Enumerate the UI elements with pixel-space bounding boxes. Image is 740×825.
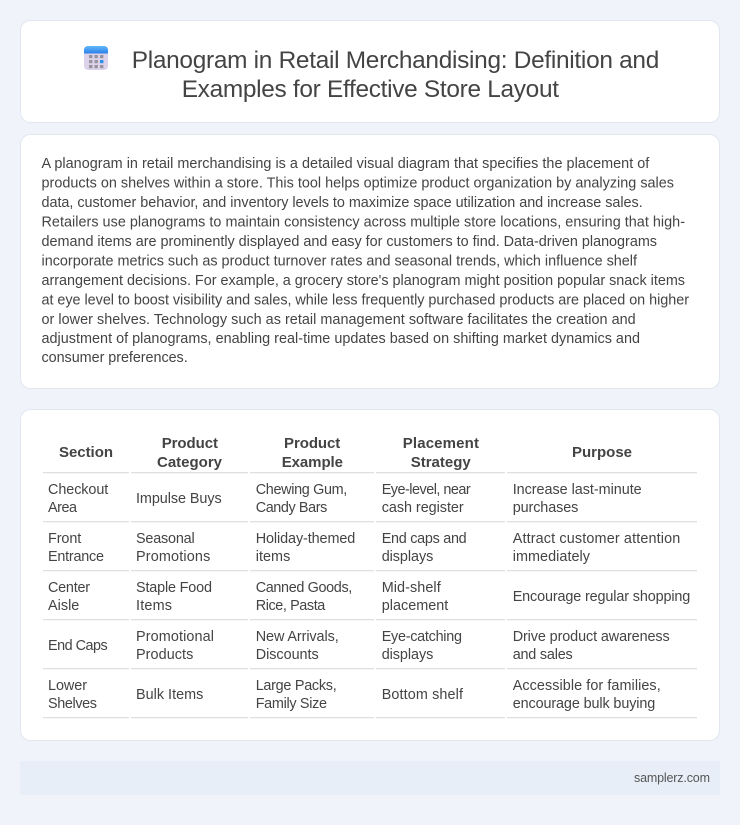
panel: title card bbox=[20, 20, 720, 122]
table row: center aisle: Canned Goods, bbox=[256, 580, 352, 596]
table row: front entrance: End caps and bbox=[382, 531, 467, 547]
table row: center aisle: placement bbox=[382, 598, 448, 614]
table row: checkout area: Area bbox=[48, 500, 77, 516]
table row: front entrance: Promotions bbox=[136, 549, 210, 565]
table row: center aisle: Mid-shelf bbox=[382, 580, 442, 596]
table row: checkout area bbox=[48, 482, 642, 516]
table header row: Example bbox=[282, 454, 343, 471]
title: Examples for Effective Store Layout bbox=[182, 76, 559, 103]
text block: planogram description: Retailers use planograms to maintain consistency across multiple store locations, ensuring that high- bbox=[42, 214, 685, 230]
table row: lower shelves: Family Size bbox=[256, 696, 327, 712]
table row: end caps: Drive product awareness bbox=[513, 629, 670, 645]
text block: planogram description: data, customer behavior, and inventory levels to maximize space utilization and increase sales. bbox=[42, 195, 643, 211]
table row: front entrance: Entrance bbox=[48, 549, 104, 565]
text block: planogram description bbox=[42, 156, 689, 366]
text block: planogram description: products on shelves within a store. This tool helps optimize product organization by analyzing sales bbox=[42, 176, 674, 192]
panel: table card bbox=[20, 410, 720, 740]
table row: lower shelves: Bulk Items bbox=[136, 687, 203, 703]
table row: front entrance: Holiday-themed bbox=[256, 531, 355, 547]
table row: lower shelves: Accessible for families, bbox=[513, 678, 661, 694]
table row: end caps: and sales bbox=[513, 647, 573, 663]
table row: lower shelves: Bottom shelf bbox=[382, 687, 464, 703]
table row: front entrance: Front bbox=[48, 531, 81, 547]
table header row: Placement bbox=[403, 435, 479, 452]
footer bbox=[20, 761, 720, 795]
table row: checkout area: Impulse Buys bbox=[136, 491, 222, 507]
table row: end caps bbox=[48, 629, 670, 663]
table row: lower shelves: Shelves bbox=[48, 696, 97, 712]
table header row: Section bbox=[59, 444, 113, 461]
table header row: Category bbox=[157, 454, 223, 471]
panel: description card bbox=[20, 134, 720, 388]
table row: end caps: New Arrivals, bbox=[256, 629, 339, 645]
table row: end caps: Discounts bbox=[256, 647, 319, 663]
table row: center aisle bbox=[48, 580, 690, 614]
table row: end caps: Products bbox=[136, 647, 193, 663]
text block: planogram description: or lower shelves. Technology such as retail management software facilitates the creation and bbox=[42, 312, 636, 328]
table row: end caps: displays bbox=[382, 647, 433, 663]
text block: planogram description: adjustment of planograms, enabling real-time updates based on shifting market dynamics and bbox=[42, 331, 640, 347]
table header row: Strategy bbox=[411, 454, 471, 471]
text block: planogram description: incorporate metrics such as product turnover rates and seasonal trends, which influence shelf bbox=[42, 254, 638, 270]
footer: samplerz.com bbox=[634, 771, 710, 785]
table row: center aisle: Items bbox=[136, 598, 172, 614]
table row: checkout area: purchases bbox=[513, 500, 578, 516]
table: planogram sections bbox=[43, 435, 697, 718]
table row: front entrance: immediately bbox=[513, 549, 591, 565]
table row: front entrance bbox=[48, 531, 680, 565]
table row: center aisle: Encourage regular shopping bbox=[513, 589, 690, 605]
table row: front entrance: Attract customer attention bbox=[513, 531, 680, 547]
text block: planogram description: A planogram in retail merchandising is a detailed visual diagram that specifies the placement of bbox=[42, 156, 650, 172]
table header row bbox=[59, 435, 632, 471]
table row: lower shelves bbox=[48, 678, 661, 712]
title: Planogram in Retail Merchandising: Definition and bbox=[132, 47, 659, 74]
table row: center aisle: Rice, Pasta bbox=[256, 598, 325, 614]
table header row: Product bbox=[284, 435, 340, 452]
table row: checkout area: cash register bbox=[382, 500, 464, 516]
title bbox=[132, 47, 659, 103]
table row: lower shelves: Lower bbox=[48, 678, 87, 694]
table row: center aisle: Aisle bbox=[48, 598, 79, 614]
table row: center aisle: Center bbox=[48, 580, 90, 596]
table header row: Product bbox=[162, 435, 218, 452]
text block: planogram description: arrangement decisions. For example, a grocery store's planogram might position popular snack items bbox=[42, 273, 685, 289]
table row: checkout area: Increase last-minute bbox=[513, 482, 642, 498]
table row: front entrance: items bbox=[256, 549, 290, 565]
table row: center aisle: Staple Food bbox=[136, 580, 212, 596]
text block: planogram description: consumer preferences. bbox=[42, 350, 188, 366]
table row: front entrance: Seasonal bbox=[136, 531, 195, 547]
table row: checkout area: Candy Bars bbox=[256, 500, 327, 516]
table row: end caps: Promotional bbox=[136, 629, 214, 645]
table row: lower shelves: Large Packs, bbox=[256, 678, 337, 694]
icon: planogram calendar grid bbox=[84, 46, 108, 70]
text block: planogram description: demand items are prominently displayed and easy for customers to find. Data-driven planograms bbox=[42, 234, 657, 250]
table row: front entrance: displays bbox=[382, 549, 433, 565]
table row: end caps: End Caps bbox=[48, 638, 108, 654]
table row: checkout area: Eye-level, near bbox=[382, 482, 471, 498]
text block: planogram description: at eye level to boost visibility and sales, while less frequently purchased products are placed on higher bbox=[42, 292, 689, 308]
table row: lower shelves: encourage bulk buying bbox=[513, 696, 655, 712]
table row: checkout area: Chewing Gum, bbox=[256, 482, 347, 498]
table row: end caps: Eye-catching bbox=[382, 629, 462, 645]
table row: checkout area: Checkout bbox=[48, 482, 108, 498]
table header row: Purpose bbox=[572, 444, 632, 461]
